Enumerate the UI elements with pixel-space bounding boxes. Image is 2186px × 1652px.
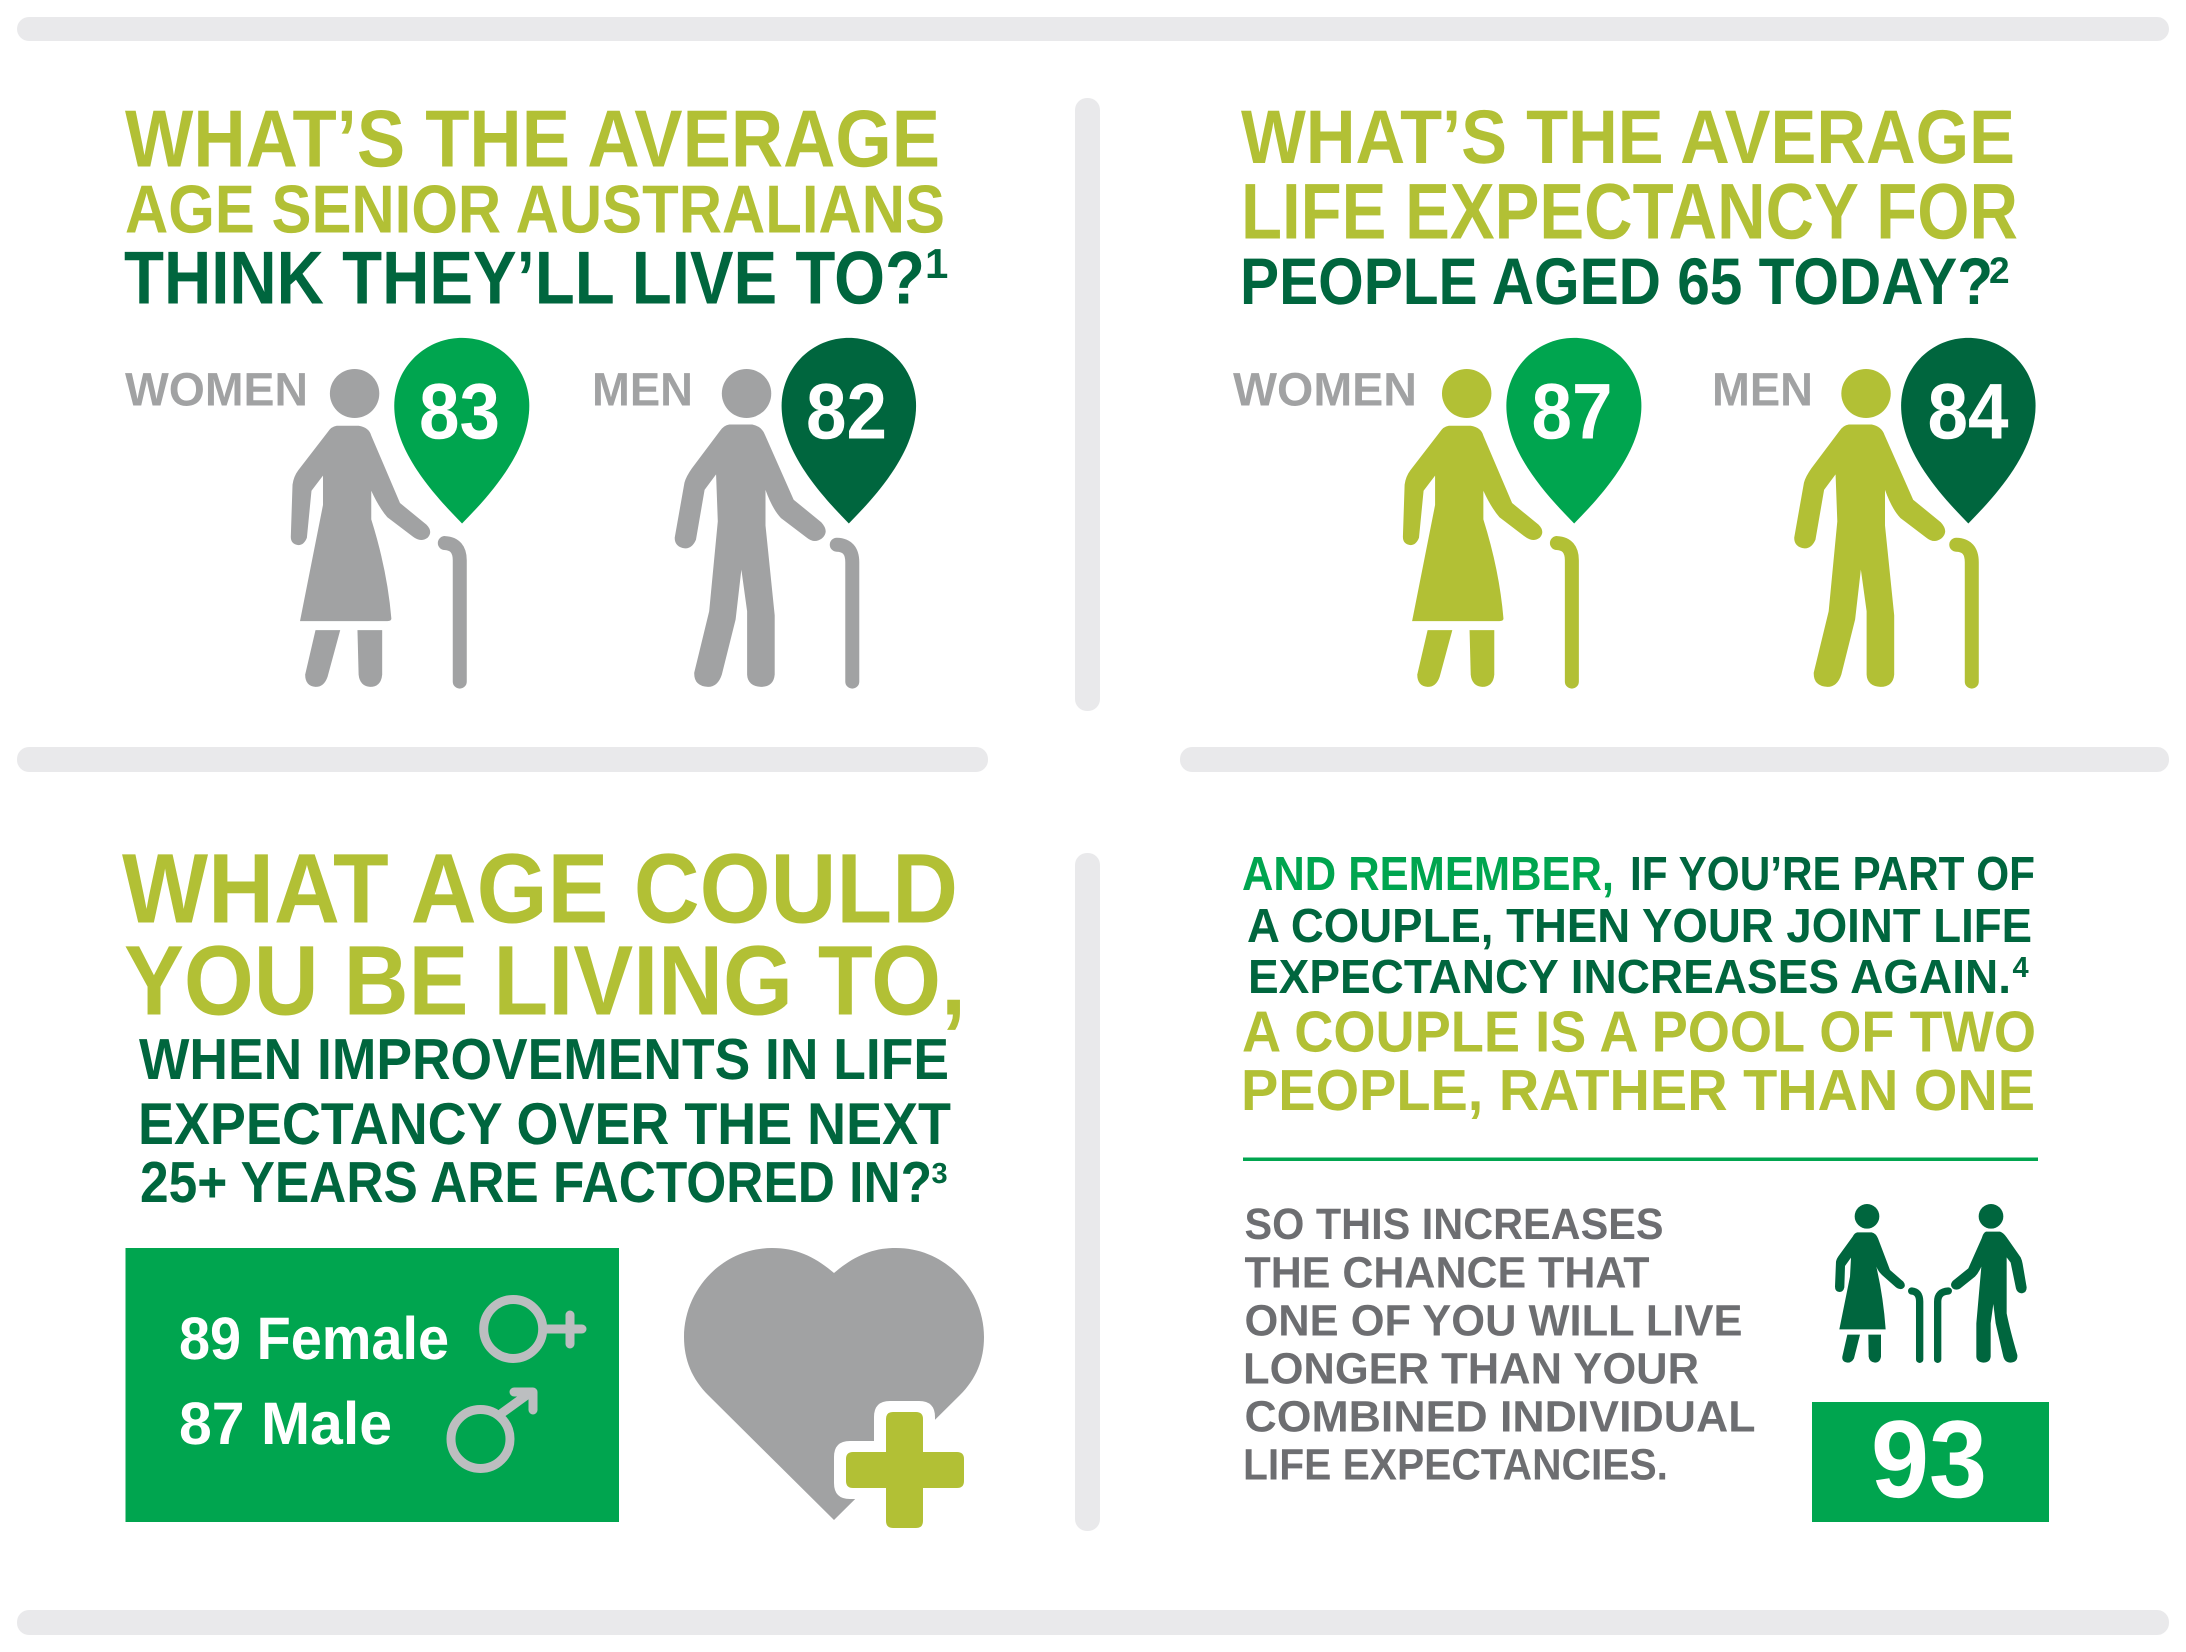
heading: and remember couple: EXPECTANCY INCREASES AGAIN. <box>1248 951 2011 1004</box>
heading: and remember couple: A COUPLE, THEN YOUR JOINT LIFE <box>1247 900 2032 953</box>
heading: what age could you be living to: 25+ YEARS ARE FACTORED IN? <box>140 1150 932 1215</box>
callout: 93 <box>1812 1398 2049 1522</box>
heading: and remember couple: AND REMEMBER, <box>1242 848 1614 901</box>
heading: average life expectancy: 2 <box>1989 250 2010 291</box>
heading: average age seniors think: THINK THEY’LL LIVE TO? <box>124 236 925 320</box>
heading: average life expectancy: WHAT’S THE AVERAGE <box>1241 95 2015 180</box>
heading: what age could you be living to: 3 <box>932 1158 948 1190</box>
panel: what age could you live to <box>122 832 984 1540</box>
callout: 89 female, 87 male: 87 Male <box>179 1390 392 1457</box>
heading: and remember couple: IF YOU’RE PART OF <box>1630 848 2035 901</box>
label: men: MEN <box>592 362 693 416</box>
heading: and remember couple <box>1241 848 2036 1123</box>
icon: pin women 83: 83 <box>419 366 500 456</box>
icon: female symbol <box>484 1300 582 1358</box>
icon: elderly couple <box>1835 1204 2027 1363</box>
icon: pin men 82 <box>782 338 916 523</box>
label: women: WOMEN <box>125 362 308 416</box>
label: men: MEN <box>1712 362 1813 416</box>
heading: what age could you be living to: EXPECTANCY OVER THE NEXT <box>138 1091 951 1157</box>
heading: what age could you be living to <box>122 832 966 1215</box>
panel: actual life expectancy <box>1233 95 2036 687</box>
icon: male symbol <box>451 1392 533 1468</box>
heading: what age could you be living to: YOU BE LIVING TO, <box>124 924 966 1036</box>
text block: so this increases the chance: LONGER THAN YOUR <box>1243 1344 1699 1394</box>
callout: 89 female, 87 male <box>126 1248 619 1522</box>
icon: pin women 87: 87 <box>1532 366 1612 456</box>
text block: so this increases the chance: COMBINED INDIVIDUAL <box>1244 1392 1756 1442</box>
heading: and remember couple: 4 <box>2012 952 2029 984</box>
heading: what age could you be living to: WHEN IMPROVEMENTS IN LIFE <box>139 1027 949 1092</box>
heading: and remember couple: A COUPLE IS A POOL OF TWO <box>1242 1000 2036 1064</box>
heading: and remember couple: PEOPLE, RATHER THAN ONE <box>1241 1058 2035 1123</box>
text block: so this increases the chance: THE CHANCE THAT <box>1244 1248 1650 1298</box>
icon: pin women 83 <box>394 338 529 523</box>
heading: average age seniors think: 1 <box>925 240 948 287</box>
text block: so this increases the chance: LIFE EXPECTANCIES. <box>1243 1440 1668 1490</box>
callout: 89 female, 87 male: 89 Female <box>179 1305 449 1372</box>
icon: elderly man with cane <box>675 369 852 687</box>
icon: pin men 82: 82 <box>806 366 887 456</box>
heading: average age seniors think: AGE SENIOR AUSTRALIANS <box>125 172 945 248</box>
icon: elderly woman with cane, olive <box>1403 369 1572 687</box>
icon: elderly man with cane, olive <box>1794 369 1972 687</box>
icon: pin women 87 <box>1506 338 1641 523</box>
icon: heart with plus <box>684 1248 984 1540</box>
heading: average life expectancy <box>1240 95 2018 318</box>
heading: what age could you be living to: WHAT AGE COULD <box>122 832 958 944</box>
heading: average age seniors think <box>124 94 948 320</box>
icon: pin men 84 <box>1901 338 2036 523</box>
heading: average life expectancy: PEOPLE AGED 65 TODAY? <box>1240 244 1993 318</box>
icon: elderly woman with cane <box>291 369 460 687</box>
text block: so this increases the chance: ONE OF YOU WILL LIVE <box>1244 1296 1742 1346</box>
text block: so this increases the chance: SO THIS INCREASES <box>1244 1200 1664 1249</box>
panel: what seniors think <box>124 94 948 687</box>
heading: average life expectancy: LIFE EXPECTANCY FOR <box>1241 166 2018 256</box>
callout: 93: 93 <box>1871 1398 1987 1521</box>
icon: pin men 84: 84 <box>1928 366 2009 456</box>
heading: average age seniors think: WHAT’S THE AVERAGE <box>125 94 940 184</box>
text block: so this increases the chance <box>1243 1200 1756 1490</box>
panel: couples <box>1241 848 2049 1522</box>
label: women: WOMEN <box>1233 362 1417 416</box>
